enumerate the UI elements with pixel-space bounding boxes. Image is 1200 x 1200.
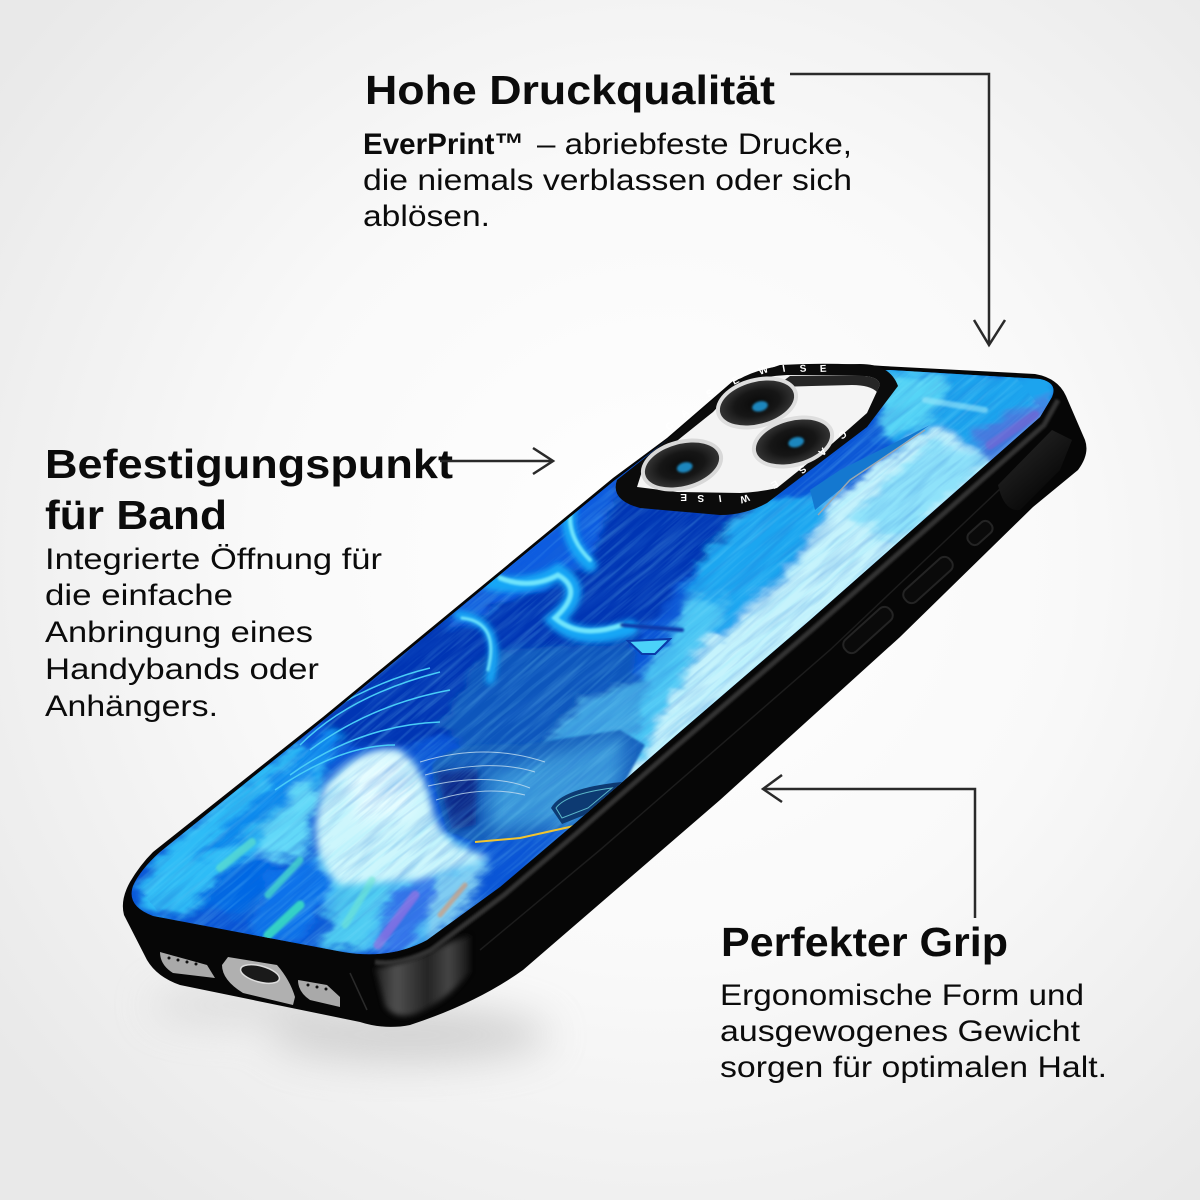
heading: Befestigungspunkt	[45, 441, 453, 487]
body text	[45, 543, 382, 723]
body text: sorgen für optimalen Halt.	[720, 1051, 1107, 1084]
callout: Befestigungspunkt für Band	[45, 441, 453, 723]
body text: – abriebfeste Drucke,	[537, 128, 852, 161]
heading: Hohe Druckqualität	[365, 67, 775, 113]
camera island	[616, 363, 898, 515]
body text: EverPrint™	[363, 128, 524, 161]
body text: Handybands oder	[45, 653, 319, 686]
callout: Perfekter Grip	[720, 919, 1107, 1084]
heading: für Band	[45, 492, 227, 538]
pale mane blob	[315, 749, 490, 885]
fur streak texture dark	[142, 371, 1028, 947]
parting line on side	[480, 470, 1020, 950]
heading	[45, 441, 453, 538]
body text: ablösen.	[363, 200, 490, 233]
corner highlight	[375, 935, 470, 1016]
printed artwork	[132, 370, 1054, 954]
action button	[965, 518, 995, 548]
corner parting line	[350, 973, 367, 1010]
artwork base colour	[120, 360, 1070, 970]
mane swirl glow	[458, 490, 630, 680]
bottom ports	[160, 952, 340, 1007]
right side buttons	[840, 518, 995, 656]
bright mane swirl	[462, 495, 682, 670]
whiskers	[420, 752, 545, 800]
shadow under phone	[150, 985, 550, 1063]
ring brand text bottom: CASEWISE	[680, 428, 848, 505]
fur streak texture light	[134, 370, 1043, 954]
body text: Ergonomische Form und	[720, 979, 1084, 1012]
phone with case	[122, 364, 1086, 1027]
lion nose	[551, 782, 622, 824]
case body	[123, 364, 1086, 1027]
arrow: to strap attachment	[440, 448, 553, 474]
artwork soft colour areas	[133, 360, 1060, 955]
body text: ausgewogenes Gewicht	[720, 1015, 1081, 1048]
arrow: top right to case back	[790, 74, 1005, 345]
lens right	[746, 407, 840, 477]
arrow: to case edge	[763, 775, 975, 918]
camera opening	[637, 375, 879, 493]
volume button lower	[840, 604, 896, 656]
body text: Anhängers.	[45, 690, 218, 723]
speaker right	[298, 980, 340, 1007]
body text	[720, 979, 1107, 1084]
iridescent brush strokes	[220, 400, 1035, 945]
volume button upper	[900, 554, 956, 606]
charging port	[222, 957, 295, 1005]
lens left	[635, 430, 729, 500]
body text: die einfache	[45, 579, 233, 612]
side switch highlight	[998, 430, 1072, 510]
lion muzzle	[432, 730, 645, 842]
body text: Anbringung eines	[45, 616, 313, 649]
ring brand text top: CASEWISE	[664, 363, 827, 433]
opening inner shadow	[775, 376, 879, 392]
heading: Perfekter Grip	[721, 919, 1008, 965]
callout: Hohe Druckqualität	[363, 67, 852, 233]
body text: Integrierte Öffnung für	[45, 543, 382, 576]
blue wedge top right	[810, 425, 930, 510]
body text	[363, 128, 852, 233]
speaker left	[160, 952, 215, 978]
fine hair lines	[275, 668, 450, 790]
yellow mouth line	[475, 826, 574, 842]
camera ring	[616, 364, 898, 515]
lion eye	[628, 639, 670, 654]
side rim highlight	[375, 400, 1058, 963]
lens upper	[710, 368, 804, 438]
body text: die niemals verblassen oder sich	[363, 164, 852, 197]
